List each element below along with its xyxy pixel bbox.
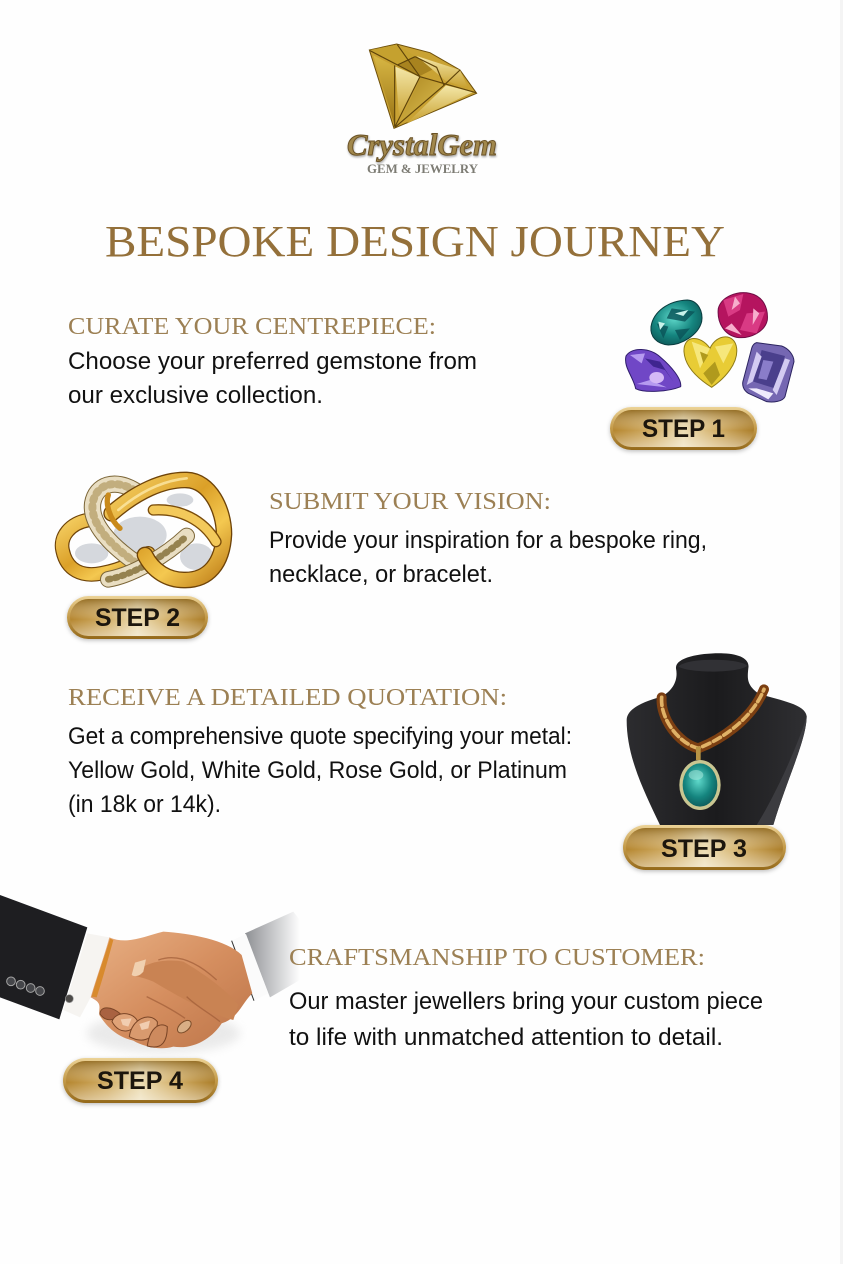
step 1 badge bbox=[610, 407, 757, 450]
gem: teal bbox=[651, 300, 702, 345]
step 2 badge: STEP 2 bbox=[95, 604, 180, 632]
logo: CrystalGem bbox=[347, 44, 497, 176]
step 1 heading: CURATE YOUR CENTREPIECE: bbox=[68, 314, 436, 340]
diamond band bbox=[92, 484, 187, 579]
step 2 badge bbox=[67, 596, 208, 639]
step 3 body text bbox=[68, 723, 572, 818]
gem: lavender emerald cut bbox=[743, 343, 794, 402]
left white cuff bbox=[63, 933, 109, 1017]
step 1 body text: our exclusive collection. bbox=[68, 382, 323, 409]
step 3 badge: STEP 3 bbox=[661, 835, 747, 863]
gold chain bbox=[662, 689, 764, 748]
pendant bbox=[679, 747, 721, 810]
step 2 heading: SUBMIT YOUR VISION: bbox=[269, 489, 551, 515]
logo tagline: GEM & JEWELRY bbox=[367, 162, 478, 176]
step 2 body text bbox=[269, 527, 707, 588]
sleeve buttons bbox=[7, 977, 44, 995]
title: BESPOKE DESIGN JOURNEY bbox=[105, 217, 725, 266]
step 3 badge bbox=[623, 825, 786, 870]
step 1 body text bbox=[68, 348, 477, 409]
icon: black bust with necklace bbox=[627, 653, 807, 825]
step 4 body text bbox=[289, 988, 763, 1051]
left gold strand bbox=[62, 520, 148, 574]
gem: magenta bbox=[718, 293, 767, 338]
step 4 badge bbox=[63, 1058, 218, 1103]
lower fingers bbox=[100, 1008, 167, 1047]
step 4 badge: STEP 4 bbox=[97, 1067, 183, 1095]
right gold strands bbox=[107, 478, 224, 580]
step 2 body text: Provide your inspiration for a bespoke ring, bbox=[269, 527, 707, 554]
bust bbox=[627, 653, 807, 825]
step 1 body text: Choose your preferred gemstone from bbox=[68, 348, 477, 375]
right grey sleeve bbox=[245, 912, 300, 997]
step 4 body text: to life with unmatched attention to detail. bbox=[289, 1024, 723, 1051]
step 3 body text: Yellow Gold, White Gold, Rose Gold, or Platinum bbox=[68, 757, 567, 784]
gem: violet diamond bbox=[626, 350, 681, 391]
step 1 badge: STEP 1 bbox=[642, 415, 725, 443]
icon: handshake bbox=[0, 895, 300, 1053]
step 3 body text: (in 18k or 14k). bbox=[68, 791, 221, 818]
step 2 body text: necklace, or bracelet. bbox=[269, 561, 493, 588]
step 4 body text: Our master jewellers bring your custom piece bbox=[289, 988, 763, 1015]
step 3 body text: Get a comprehensive quote specifying your metal: bbox=[68, 723, 572, 750]
step 3 heading: RECEIVE A DETAILED QUOTATION: bbox=[68, 685, 507, 711]
clasped hands bbox=[91, 932, 252, 1048]
icon: five gemstones bbox=[626, 293, 794, 402]
left dark sleeve bbox=[0, 895, 87, 1019]
icon: gold diamond bbox=[369, 44, 477, 128]
gem: yellow heart bbox=[684, 337, 737, 387]
icon: gold infinity knot ring bbox=[62, 478, 224, 580]
step 4 heading: CRAFTSMANSHIP TO CUSTOMER: bbox=[289, 945, 705, 971]
right white cuff bbox=[232, 934, 268, 1001]
logo wordmark: CrystalGem bbox=[347, 127, 497, 162]
